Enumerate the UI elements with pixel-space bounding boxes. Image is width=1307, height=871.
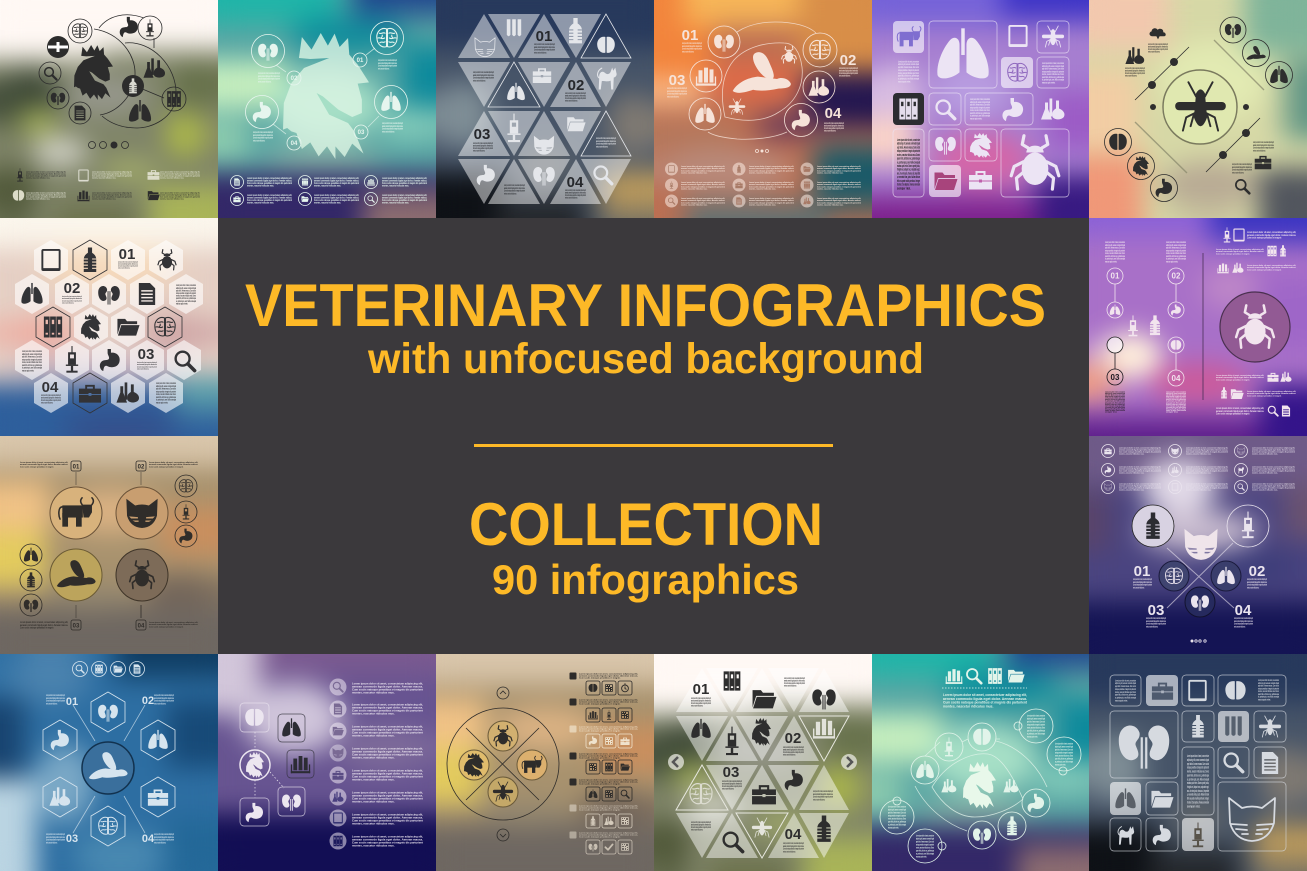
tile: bug xyxy=(1001,129,1069,197)
column 01: 01 xyxy=(1111,272,1120,280)
circle: bug xyxy=(116,549,168,601)
tile: binders xyxy=(893,93,924,125)
icon: stomach xyxy=(1022,789,1050,817)
icon: mosquito xyxy=(729,99,745,115)
tile: kidneys large xyxy=(1110,711,1178,778)
triangle grid xyxy=(458,14,631,204)
circle: mosquito xyxy=(488,777,518,807)
tile: stomach xyxy=(1146,818,1178,851)
panel: cat with crossed lines (right column bottom) xyxy=(1089,436,1307,654)
text circles xyxy=(880,709,1081,863)
top right rows xyxy=(1216,227,1296,273)
central mosquito circle xyxy=(1163,70,1237,144)
number labels xyxy=(46,694,174,845)
dotted divider xyxy=(942,687,1027,689)
icon: briefcase xyxy=(969,171,992,190)
network paths xyxy=(915,739,1047,831)
tile: mosquito xyxy=(1037,21,1069,53)
tile: rooster xyxy=(965,129,997,161)
briefcase with text xyxy=(1253,141,1274,169)
icon: brain dark circle xyxy=(1159,561,1189,591)
top icon row xyxy=(946,668,1025,684)
number labels: 03 xyxy=(1148,602,1164,619)
diagonal shadow strokes xyxy=(1135,40,1264,173)
hexagon: stomach xyxy=(43,720,77,760)
top icon row xyxy=(72,662,144,676)
triangle contents row 3: 03 xyxy=(474,126,490,143)
legend rows xyxy=(230,176,427,206)
triangle contents row 2: 02 xyxy=(568,77,584,94)
hexagon: brain xyxy=(91,806,125,846)
item 01 xyxy=(682,26,740,58)
icon: brain in circle xyxy=(68,19,92,43)
legend rows xyxy=(1102,444,1295,494)
right list row 3 light xyxy=(570,726,638,748)
right list row 1 xyxy=(570,672,638,695)
panel: four animals in circles (left column bottom) xyxy=(0,436,218,654)
number labels: 04 xyxy=(1235,602,1252,619)
item 03 dark xyxy=(1105,337,1126,414)
pagination dots xyxy=(756,150,768,152)
heading: veterinary infographics: VETERINARY INFOGRAPHICS xyxy=(245,272,1046,339)
triangle contents row 4 xyxy=(477,165,612,200)
circle: cow xyxy=(50,487,102,539)
tile: tubes xyxy=(1218,711,1249,742)
icon: brain xyxy=(968,723,996,751)
column 02 xyxy=(1166,241,1186,318)
icons syringe and thermometer xyxy=(1128,315,1160,336)
intro text xyxy=(943,693,1027,709)
tile: brain and text xyxy=(1218,675,1286,706)
center panel background xyxy=(218,218,1089,654)
label 01 xyxy=(20,461,81,485)
number labels: 02 xyxy=(1249,563,1265,580)
triangle contents row 1: 01 xyxy=(536,28,552,45)
blurred background xyxy=(0,218,218,436)
blurred background xyxy=(218,654,436,871)
blurred background xyxy=(0,654,218,871)
icon: flasks xyxy=(143,58,165,78)
tile: magnifier xyxy=(929,93,961,125)
item 01: brain: 01 xyxy=(357,58,364,64)
hexagon row 3 xyxy=(36,307,182,347)
box: lungs dark xyxy=(278,714,305,742)
item 01: 01 xyxy=(682,27,698,44)
item 03 xyxy=(667,60,722,130)
right list row 2 xyxy=(570,698,638,722)
list items xyxy=(330,678,423,850)
tile: folder xyxy=(1146,782,1178,815)
icons: flasks xyxy=(941,779,1018,792)
big circle with X xyxy=(447,708,559,820)
triangle grid xyxy=(676,668,849,858)
item 03: 03 xyxy=(669,72,685,89)
tile: stomach and text xyxy=(965,93,1033,125)
arrow right xyxy=(841,754,857,770)
panel: circle with X and icon boxes (bottom row 3) xyxy=(436,654,654,871)
icon: cat face xyxy=(1184,529,1218,560)
panel: mosquito radial on peach and green (top row 6) xyxy=(1089,0,1307,218)
icon: turtle xyxy=(733,52,791,93)
circle: cow xyxy=(517,750,547,780)
column 01 xyxy=(1105,241,1125,318)
panel: hexagon ring around turtle (bottom row 1) xyxy=(0,654,218,871)
item 02 xyxy=(803,33,858,78)
icon: turtle in circle xyxy=(1242,40,1270,66)
number labels: 01 xyxy=(1134,563,1150,580)
item 04: stomach: 04 xyxy=(291,141,298,147)
tile: syringe xyxy=(1182,818,1214,851)
icon: kidneys xyxy=(968,821,996,849)
item 02: kidneys xyxy=(252,34,301,85)
panel: rooster eye network on teal (bottom row 5) xyxy=(872,654,1090,871)
triangle contents row 2: 02 xyxy=(785,730,801,747)
panel: triangle grid on navy (top row 3) xyxy=(436,0,654,218)
icon: magnifier in circle xyxy=(39,62,61,84)
magnifier with text xyxy=(1232,163,1252,193)
hexagon row 4 xyxy=(15,340,201,380)
tile: cat face xyxy=(1218,782,1286,851)
hexagon: kidneys xyxy=(91,692,125,732)
hexagon row 5: 04 xyxy=(42,379,59,396)
triangle contents row 4 xyxy=(691,816,831,854)
icon: stomach in circle xyxy=(1150,174,1178,202)
heading: collection: COLLECTION xyxy=(469,491,823,558)
icon: syringe in black circle xyxy=(47,36,69,58)
tile: text xyxy=(1110,675,1141,706)
box: stomach xyxy=(240,798,269,826)
blurred background xyxy=(1089,436,1307,654)
tile: black text block xyxy=(893,129,924,197)
tile: tall text xyxy=(1182,747,1214,815)
right list row 5 xyxy=(570,778,638,801)
legend row 1 xyxy=(17,168,200,182)
panel: rounded tile grid on purple (top row 5) xyxy=(872,0,1090,218)
icon: brain in circle xyxy=(1104,128,1132,156)
label 02 xyxy=(136,461,198,485)
legend row 2 xyxy=(13,190,200,201)
pagination dots xyxy=(88,142,128,148)
small circles left xyxy=(20,544,42,616)
label 04: 04 xyxy=(138,624,145,630)
icon: thermometer xyxy=(998,812,1026,840)
right list row 6 light xyxy=(570,804,638,828)
icon: document in circle xyxy=(69,102,91,124)
tile: scared cat xyxy=(1110,818,1141,851)
panel: bug circle with timeline (right column top) xyxy=(1089,218,1307,436)
tile: cow xyxy=(893,21,924,53)
connector lines xyxy=(273,48,379,134)
divider rule xyxy=(474,444,833,447)
tile: lungs xyxy=(929,21,997,88)
connecting arcs xyxy=(94,15,176,128)
icon: flasks xyxy=(1041,98,1064,120)
triangle contents row 3: 03 xyxy=(723,764,739,781)
number labels: 01 xyxy=(66,696,78,708)
icon: syringe xyxy=(935,733,963,761)
triangle contents row 1: 01 xyxy=(693,681,709,698)
tile: brain xyxy=(1001,57,1033,88)
hexagon row 1 xyxy=(34,240,183,280)
panel: hexagon grid (left column top) xyxy=(0,218,218,436)
icon: stomach xyxy=(120,17,138,37)
timeline lower right xyxy=(1206,118,1260,172)
tile: tablet xyxy=(1182,675,1214,706)
triangle contents row 3 xyxy=(473,114,616,155)
icon: lungs xyxy=(911,756,939,784)
panel: turtle diagram on orange (top row 4) xyxy=(654,0,872,218)
panel: boxes and list on violet (bottom row 2) xyxy=(218,654,436,871)
tile: text xyxy=(1037,57,1069,88)
tile: mosquito xyxy=(1254,711,1286,742)
item 01: brain xyxy=(353,22,404,71)
big bug circle xyxy=(1220,292,1290,362)
icon: lungs in circle xyxy=(1266,62,1292,88)
small circles right xyxy=(175,475,197,547)
icon: thermometer circle xyxy=(1132,505,1174,547)
box: brain xyxy=(240,703,269,732)
number labels xyxy=(1133,563,1267,629)
tile: folder xyxy=(929,165,961,197)
icon: syringe circle xyxy=(1227,505,1269,547)
text block xyxy=(898,60,919,84)
arrow left xyxy=(668,754,684,770)
hexagon: briefcase xyxy=(141,777,175,817)
icon: rooster xyxy=(74,45,113,100)
item 04: 04 xyxy=(1172,374,1181,383)
icon: rooster center xyxy=(963,762,996,809)
circle: rooster xyxy=(459,750,489,780)
number labels: 02 xyxy=(142,695,154,707)
item 04: stomach xyxy=(246,96,301,150)
triangle contents row 4: 04 xyxy=(567,174,584,191)
connector lines xyxy=(73,705,145,833)
column 02: 02 xyxy=(1172,272,1181,280)
dotted connector xyxy=(255,732,284,798)
panel: triangle grid on green blur (bottom row 4) xyxy=(654,654,872,871)
item 03: lungs xyxy=(354,86,408,139)
pagination dots xyxy=(1190,640,1206,642)
number labels: 04 xyxy=(142,833,155,845)
item 04: 04 xyxy=(825,105,842,122)
triangle contents row 3 xyxy=(690,764,833,804)
subheading: 90 infographics: 90 infographics xyxy=(492,556,799,603)
center circle: turtle xyxy=(82,742,134,794)
item 03 dark: 03 xyxy=(1111,373,1120,382)
icon: rooster in circle xyxy=(1128,152,1154,180)
hexagon: lungs xyxy=(141,720,175,760)
icon: lungs xyxy=(129,100,151,122)
circle: rooster xyxy=(240,750,270,780)
box: kidneys xyxy=(278,787,305,816)
triangle contents row 4: 04 xyxy=(785,826,802,843)
timeline upper left xyxy=(1135,47,1189,100)
blurred background xyxy=(872,0,1090,218)
label 02: 02 xyxy=(138,464,145,470)
panel: rooster with numbered circles (top row 2) xyxy=(218,0,436,218)
icon: syringe in circle xyxy=(138,16,162,40)
icon: large rooster xyxy=(283,33,369,159)
hexagon: flasks xyxy=(43,777,77,817)
panel: rooster circle diagram (top row 1) xyxy=(0,0,218,218)
tile: lungs xyxy=(1110,782,1141,815)
right list row 4 xyxy=(570,752,638,774)
legend rows xyxy=(665,162,861,208)
vertical divider xyxy=(1202,253,1204,400)
icon: flask with text xyxy=(1125,47,1145,78)
tile: kidneys xyxy=(929,129,961,161)
blurred background xyxy=(1089,218,1307,436)
circle: bug xyxy=(488,721,518,751)
side dots xyxy=(1150,104,1249,110)
circle: turtle xyxy=(50,549,102,601)
bottom right rows xyxy=(1216,372,1296,417)
hexagon row 1: 01 xyxy=(119,246,135,263)
triangle contents row 1 xyxy=(475,18,615,57)
icon: kidneys in circle xyxy=(1220,17,1246,43)
blurred background xyxy=(1089,0,1307,218)
tile: magnifier xyxy=(1218,747,1249,778)
item 03: lungs: 03 xyxy=(358,130,365,136)
item 04 xyxy=(784,71,844,136)
hexagon row 2: 02 xyxy=(64,280,80,297)
hexagon row 5 xyxy=(34,373,183,413)
hexagon row 4: 03 xyxy=(138,346,154,363)
tile: thermometer xyxy=(1182,711,1214,742)
box: rack dark xyxy=(287,750,314,778)
label 03 xyxy=(20,605,81,630)
tile: briefcase xyxy=(1146,675,1178,706)
icon: lungs dark circle xyxy=(1211,561,1241,591)
icon: binders in circle xyxy=(162,87,186,111)
icon: bug xyxy=(782,47,796,63)
triangle contents row 1 xyxy=(691,671,836,709)
icon: cloud with text xyxy=(1148,28,1168,54)
triangle contents row 2 xyxy=(473,68,617,103)
panel: rounded tile grid on navy (bottom row 6) xyxy=(1089,654,1307,871)
icon: kidneys dark circle xyxy=(1185,587,1215,617)
item 02: kidneys: 02 xyxy=(291,76,298,82)
blurred background xyxy=(654,0,872,218)
chevron up and down xyxy=(497,687,509,841)
tile: document xyxy=(1254,747,1286,778)
item 04 xyxy=(1166,337,1187,414)
label 01: 01 xyxy=(73,464,80,470)
item 02: 02 xyxy=(840,52,856,69)
connecting outlines xyxy=(708,22,816,139)
crossed lines xyxy=(1167,543,1234,608)
icon: kidneys in circle xyxy=(47,87,69,109)
number labels: 03 xyxy=(66,833,78,845)
icon: tablet xyxy=(1008,25,1028,47)
circle: cat xyxy=(116,487,168,539)
triangle contents row 2 xyxy=(691,718,835,757)
label 03: 03 xyxy=(73,624,80,630)
label 04 xyxy=(136,605,198,630)
icon: thermometer in black circle xyxy=(122,75,144,97)
subheading: with unfocused background: with unfocused background xyxy=(367,335,924,383)
right list row 7 light xyxy=(570,832,638,854)
hexagon row 2 xyxy=(15,274,203,314)
